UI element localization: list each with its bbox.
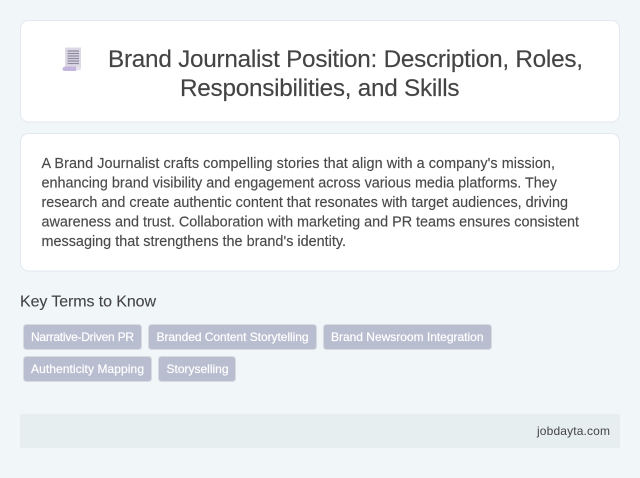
footer bar bbox=[20, 414, 620, 448]
chip: Branded Content Storytelling: Branded Content Storytelling bbox=[156, 330, 308, 344]
description text: research and create authentic content that resonates with target audiences, driving bbox=[42, 195, 568, 211]
panel: title card bbox=[20, 20, 620, 122]
description text: messaging that strengthens the brand's identity. bbox=[42, 234, 346, 250]
title bbox=[108, 46, 583, 102]
title: Responsibilities, and Skills bbox=[180, 75, 460, 102]
chip: Brand Newsroom Integration: Brand Newsroom Integration bbox=[331, 330, 484, 344]
icon: document scroll bbox=[62, 48, 81, 71]
chip: Branded Content Storytelling bbox=[148, 324, 316, 350]
footer bar: jobdayta.com bbox=[536, 424, 610, 438]
description text bbox=[42, 156, 579, 250]
chip: Brand Newsroom Integration bbox=[324, 324, 492, 350]
title: Brand Journalist Position: Description, Roles, bbox=[108, 46, 583, 73]
panel: description card bbox=[20, 134, 620, 271]
chip: Authenticity Mapping: Authenticity Mapping bbox=[31, 362, 144, 376]
chip: Narrative-Driven PR: Narrative-Driven PR bbox=[31, 330, 134, 344]
heading: key terms: Key Terms to Know bbox=[20, 294, 156, 310]
chip: Storyselling: Storyselling bbox=[166, 362, 228, 376]
description text: A Brand Journalist crafts compelling stories that align with a company's mission, bbox=[42, 156, 555, 172]
chip: Storyselling bbox=[158, 356, 236, 382]
chip: Authenticity Mapping bbox=[24, 356, 152, 382]
description text: awareness and trust. Collaboration with marketing and PR teams ensures consistent bbox=[42, 214, 579, 230]
description text: enhancing brand visibility and engagement across various media platforms. They bbox=[42, 176, 558, 192]
chip: Narrative-Driven PR bbox=[24, 324, 142, 350]
